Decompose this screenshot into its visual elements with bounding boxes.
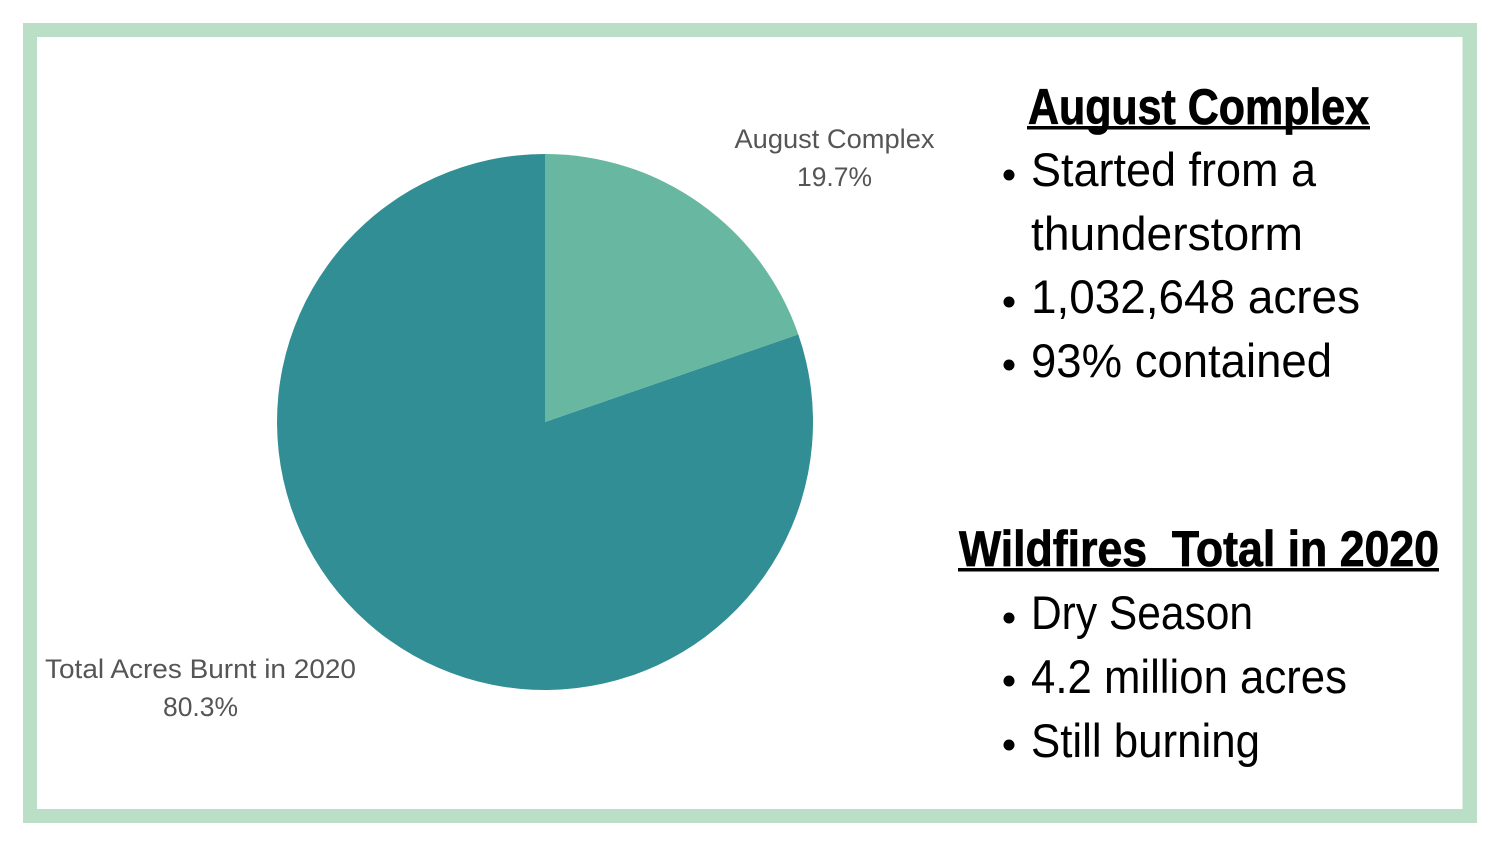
bullet list: August Complex facts: Started from a (1031, 143, 1317, 196)
heading: August Complex: August Complex (1028, 79, 1369, 135)
heading: Wildfires Total in 2020: Wildfires Total in 2020 (959, 521, 1439, 577)
pie slice: August Complex 19.7% (545, 154, 798, 422)
bullet list: August Complex facts (1004, 143, 1360, 387)
bullet list: wildfire facts: Still burning (1031, 714, 1260, 767)
text block: August Complex (1004, 79, 1370, 387)
pie label: August Complex (734, 124, 935, 192)
bullet list: wildfire facts (1004, 586, 1347, 767)
bullet list: August Complex facts: 1,032,648 acres (1031, 270, 1360, 323)
pie label: total acres burnt (45, 654, 356, 722)
pie chart (277, 154, 813, 690)
pie slice: total acres burnt 80.3% (277, 154, 813, 690)
pie label: August Complex: August Complex (734, 124, 935, 154)
pie label: total acres burnt: 80.3% (163, 692, 238, 722)
bullet list: August Complex facts: 93% contained (1031, 334, 1332, 387)
bullet list: wildfire facts: Dry Season (1031, 586, 1253, 639)
bullet list: August Complex facts: thunderstorm (1031, 207, 1303, 260)
text block: Wildfires Total in 2020 (958, 521, 1439, 767)
pie label: August Complex: 19.7% (797, 162, 872, 192)
pie label: total acres burnt: Total Acres Burnt in 2020 (45, 654, 356, 684)
bullet list: wildfire facts: 4.2 million acres (1031, 650, 1347, 703)
